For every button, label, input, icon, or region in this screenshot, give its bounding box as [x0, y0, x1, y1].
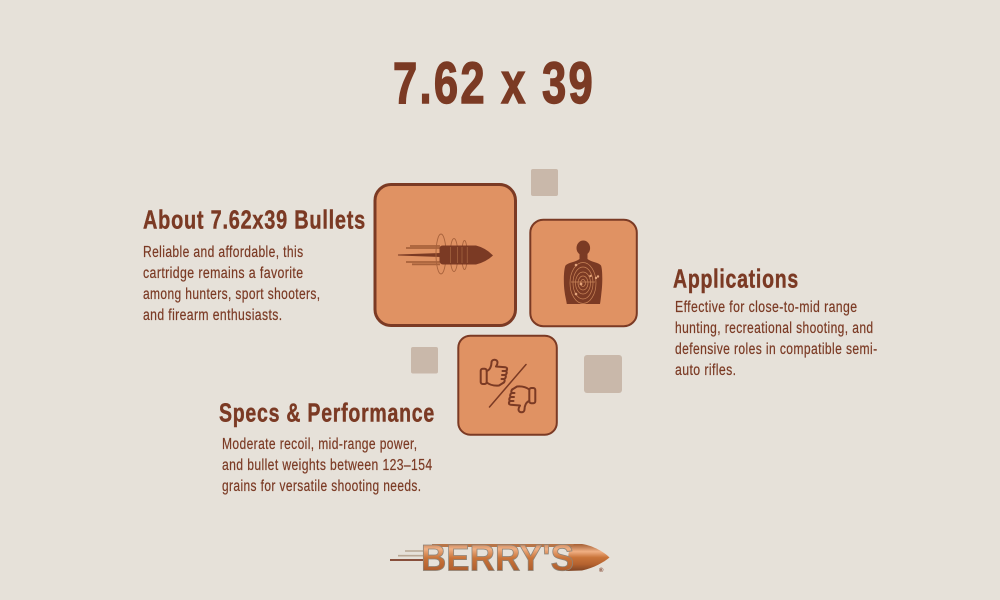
body: about — [143, 244, 320, 324]
body: specs: Moderate recoil, mid-range power, — [222, 436, 418, 453]
logo: Berry's: ® — [599, 567, 604, 574]
icon: thumbs up and down — [481, 360, 535, 412]
body: applications: Effective for close-to-mid range — [675, 299, 858, 316]
title: 7.62 x 39 — [393, 51, 595, 116]
body: about: Reliable and affordable, this — [143, 244, 304, 261]
body: specs — [222, 436, 432, 495]
text block: about — [143, 204, 366, 324]
body: applications: auto rifles. — [675, 362, 736, 379]
panel: thumbs icon tile — [458, 336, 557, 435]
decorative square: top — [531, 169, 558, 196]
body: applications: hunting, recreational shooting, and — [675, 320, 874, 337]
heading: specs: Specs & Performance — [219, 398, 435, 428]
heading: applications: Applications — [673, 264, 799, 294]
body: applications — [675, 299, 878, 379]
heading: about: About 7.62x39 Bullets — [143, 204, 366, 234]
icon: speeding bullet — [398, 234, 493, 274]
panel: target icon tile — [530, 220, 637, 326]
body: applications: defensive roles in compatible semi- — [675, 341, 878, 358]
icon: silhouette target — [564, 240, 602, 304]
body: about: cartridge remains a favorite — [143, 265, 304, 282]
text block: applications — [673, 264, 878, 379]
decorative square: right — [584, 355, 622, 393]
text block: specs — [219, 398, 435, 495]
body: specs: and bullet weights between 123–154 — [222, 457, 432, 474]
logo: Berry's: BERRY'S — [421, 538, 574, 578]
decorative square: left — [411, 347, 438, 374]
body: specs: grains for versatile shooting needs. — [222, 478, 422, 495]
body: about: among hunters, sport shooters, — [143, 286, 320, 303]
panel: bullet icon tile — [375, 184, 516, 326]
body: about: and firearm enthusiasts. — [143, 307, 282, 324]
